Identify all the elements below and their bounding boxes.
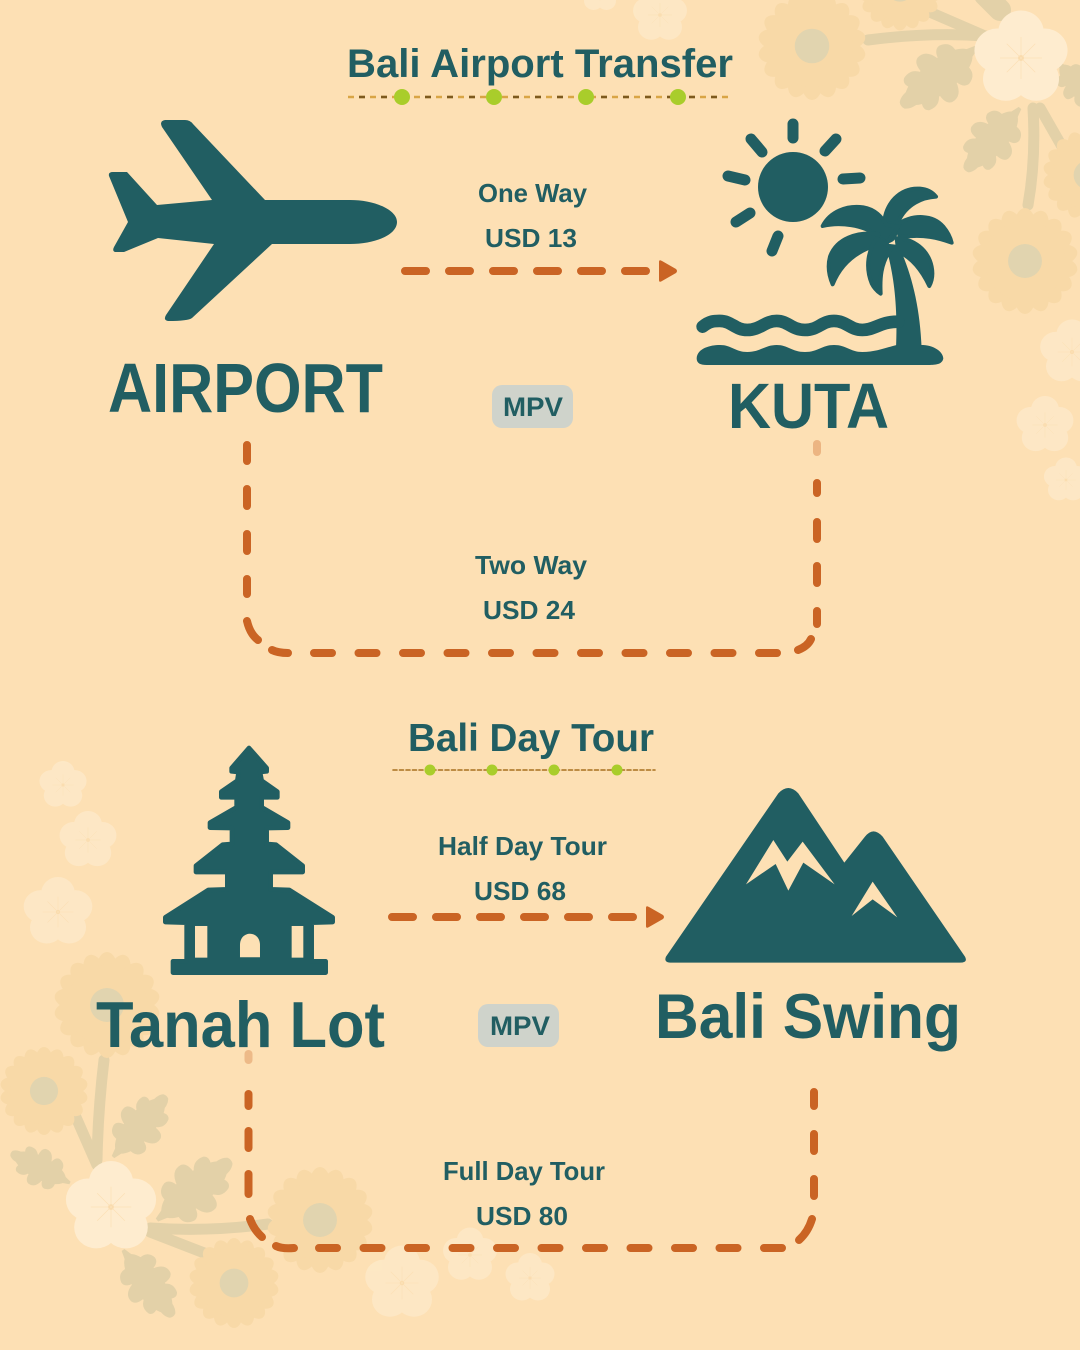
label: AIRPORT: AIRPORT — [108, 349, 383, 427]
dashed route: full day loop — [248, 1054, 814, 1248]
full day route text: USD 80 — [476, 1201, 568, 1231]
half day route text: USD 68 — [474, 876, 566, 906]
label: Bali Swing: Bali Swing — [655, 982, 961, 1052]
one way route text: USD 13 — [485, 223, 577, 253]
icon: Balinese temple — [165, 748, 333, 973]
heading: Bali Airport Transfer: Bali Airport Transfer — [347, 42, 733, 86]
dashed route: two way loop — [247, 444, 817, 653]
heading: Bali Day Tour: Bali Day Tour — [408, 717, 654, 760]
floral decoration: bottom left — [0, 761, 554, 1331]
two way route text: USD 24 — [483, 595, 576, 625]
badge: MPV: MPV — [503, 392, 563, 422]
two way route text: Two Way — [475, 550, 588, 580]
one way route text — [478, 178, 588, 253]
floral decoration: top right — [580, 0, 1080, 500]
badge: MPV: MPV — [490, 1011, 550, 1041]
icon: sun and palm beach — [697, 124, 952, 365]
badge: MPV — [478, 1004, 559, 1047]
label: Tanah Lot: Tanah Lot — [96, 988, 385, 1061]
divider: stitched line with buttons (bottom) — [393, 764, 655, 776]
icon: airplane — [109, 120, 397, 321]
full day route text — [443, 1156, 605, 1231]
label: KUTA: KUTA — [728, 370, 889, 442]
full day route text: Full Day Tour — [443, 1156, 605, 1186]
badge: MPV — [492, 385, 573, 428]
half day route text — [438, 831, 607, 906]
half day route text: Half Day Tour — [438, 831, 607, 861]
divider: stitched line with buttons (top) — [348, 89, 733, 105]
icon: mountains — [665, 788, 966, 963]
two way route text — [475, 550, 588, 625]
arrow: Tanah Lot to Bali Swing — [392, 906, 664, 928]
arrow: airport to Kuta — [405, 260, 677, 282]
one way route text: One Way — [478, 178, 588, 208]
